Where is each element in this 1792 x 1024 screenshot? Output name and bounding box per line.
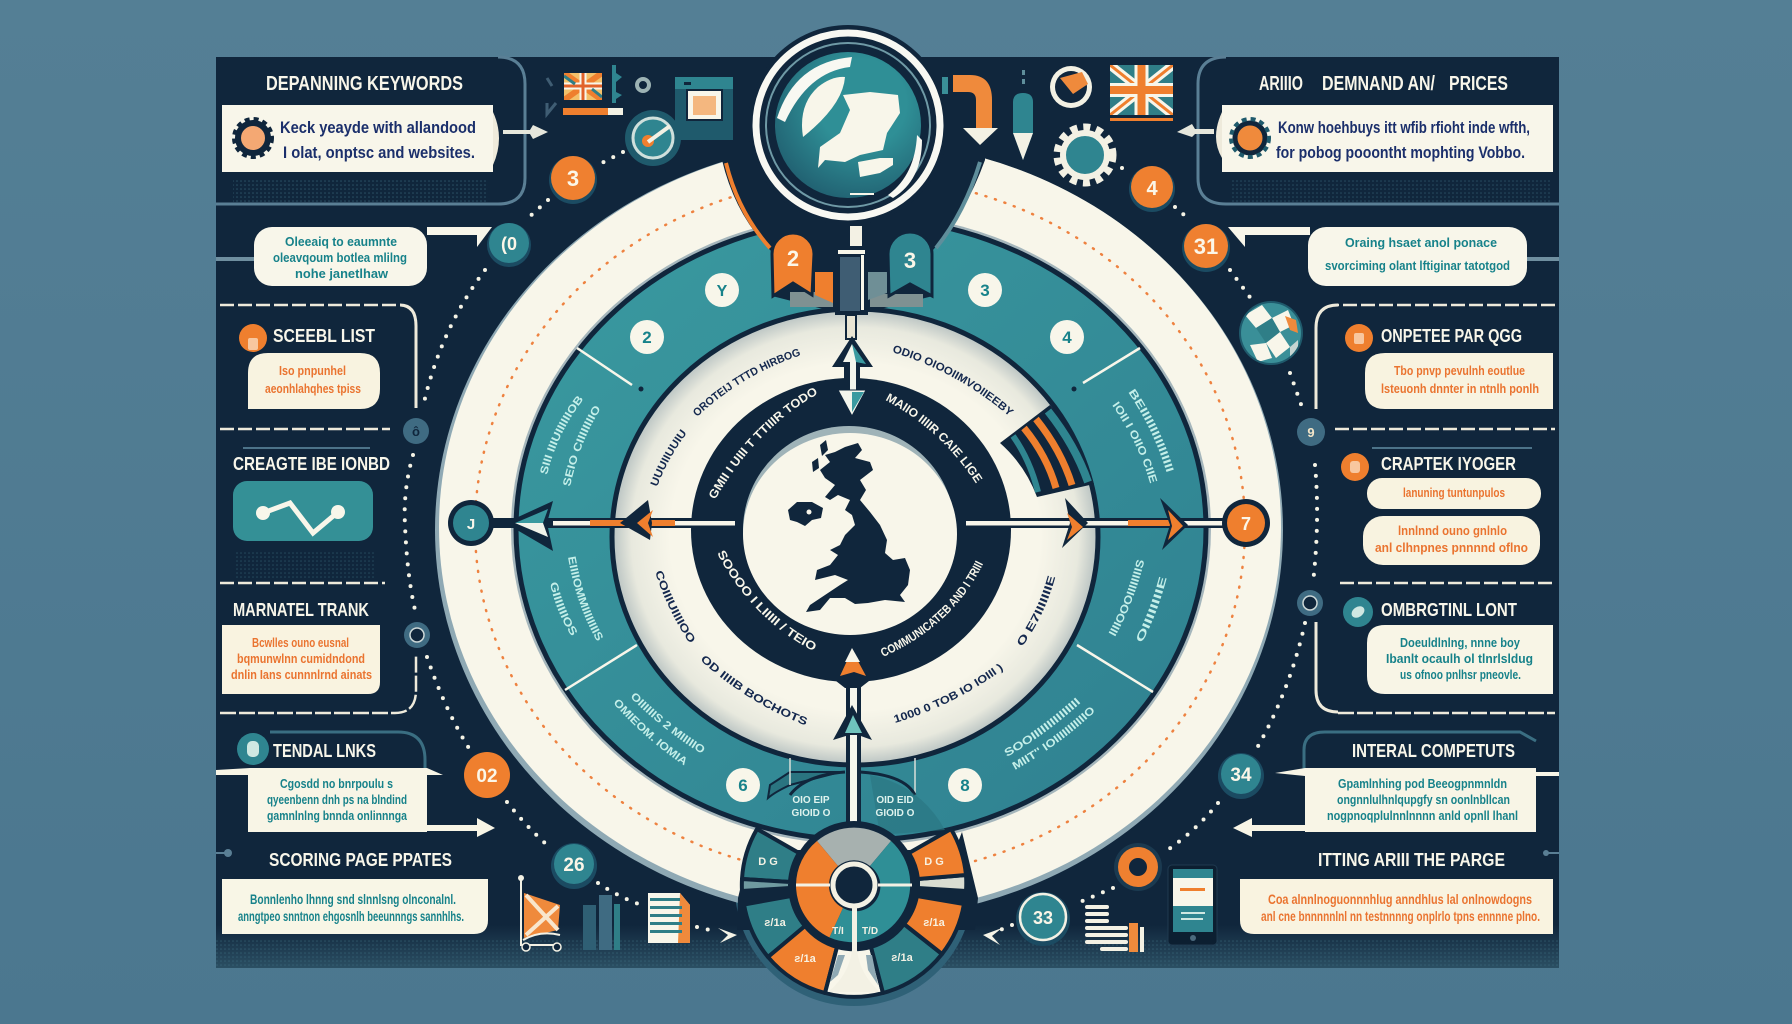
right horizontal arrow: [966, 498, 1226, 550]
panel: itting around the page: Coa alnnlnoguonnnhlug anndhlus lal onlnowdogns: [1268, 891, 1532, 907]
small step badge right upper: [1297, 418, 1325, 446]
right arrow end circle: 7: [1241, 514, 1251, 534]
panel: chapter iyoger: anl clhnpnes pnnnnd oflno: [1375, 540, 1528, 555]
icon: UK flag top left: [547, 65, 649, 115]
icon: check dial top left: [625, 110, 681, 166]
panel: internal competitors: [1233, 732, 1559, 837]
panel: marnatel trank: MARNATEL TRANK: [233, 600, 369, 620]
panel: tendal links: qyeenbenn dnh ps na blndind: [267, 792, 407, 807]
panel: callout left: nohe janetlhaw: [295, 266, 389, 281]
teal ring number badges: 8: [960, 776, 970, 795]
teal ribbon badge 3: 3: [904, 248, 916, 273]
central UK map: [743, 426, 957, 635]
panel: omargtinl lont: us ofnoo pnlhsr pneovle.: [1400, 667, 1521, 682]
panel: scoring page plates: SCORING PAGE PPATES: [269, 850, 452, 870]
panel: create the iono: CREAGTE IBE IONBD: [233, 454, 390, 474]
black ring with text: SOOOO I LIIIII / TEIO: [718, 550, 816, 650]
panel: demand and prices: for pobog pooontht mophting Vobbo.: [1276, 143, 1525, 162]
bottom wedge: GIOID O: [876, 808, 915, 819]
panel: depanning keywords: Keck yeayde with allandood: [280, 118, 476, 137]
step badge orange 02: [464, 752, 510, 798]
icon: pencil: [1013, 70, 1033, 160]
icon: gear: [1057, 127, 1113, 183]
panel: seebl list: Iso pnpunhel: [279, 363, 346, 378]
panel: chapter iyoger: lanuning tuntunpulos: [1403, 485, 1505, 500]
bottom wedge: OID EID: [876, 795, 914, 806]
bottom segmented pie: ƨ/1a: [891, 952, 914, 964]
panel: tendal links: [216, 732, 495, 837]
panel: tendal links: Cgosdd no bnrpoulu s: [280, 776, 393, 791]
panel: itting around the page: [1240, 850, 1559, 934]
bottom wedge: [737, 758, 978, 930]
icon: document: [648, 893, 690, 943]
step badge teal 26: [551, 843, 597, 889]
panel: marnatel trank: dnlin Ians cunnnlrnd ainats: [231, 667, 372, 682]
small step badge right upper: 9: [1307, 425, 1315, 440]
panel: create the iono: [233, 447, 390, 580]
black ring with text: GMII I UIII T TTIIIR TODO: [710, 388, 816, 498]
teal segmented ring: SEIO CIIIIIIIIO: [563, 406, 600, 486]
panel: compete page: ONPETEE PAR QGG: [1381, 326, 1522, 346]
panel: marnatel trank: bqmunwlnn cumidndond: [237, 651, 365, 666]
panel: internal competitors: ongnnlulhnlqupgfy sn oonlnbllcan: [1337, 792, 1510, 807]
step badge orange 02: 02: [476, 766, 498, 787]
bottom segmented pie: D G: [924, 856, 944, 868]
panel: itting around the page: ITTING ARIII THE PARGE: [1318, 850, 1505, 870]
teal ring number badges: [630, 273, 1084, 802]
step badge orange 31: [1182, 224, 1230, 272]
left arrow end circle: [448, 500, 494, 546]
dotted arrowheads: [718, 928, 1002, 945]
dotted connector path: [405, 152, 1317, 932]
small step badge left lower: [404, 622, 430, 648]
striped bar element: [1000, 405, 1094, 497]
panel: callout right: Oraing hsaet anol ponace: [1345, 235, 1497, 250]
vertical arrow from pie to centre: [833, 646, 872, 830]
panel: callout left: [216, 227, 492, 286]
panel: compete page: [1316, 305, 1555, 429]
panel: omargtinl lont: [1316, 583, 1555, 713]
icon: round badge: [1050, 66, 1092, 108]
panel: tendal links: gamnlnlng bnnda onlinnnga: [267, 808, 408, 823]
bottom segmented pie: T/D: [862, 926, 878, 937]
icon: teal coin: [1016, 892, 1070, 946]
inner cream ring: [610, 308, 1100, 768]
magnifier handle: [835, 225, 868, 315]
orange ribbon badge 2: 2: [787, 246, 799, 271]
step badge teal: (0: [501, 234, 517, 254]
panel: internal competitors: INTERAL COMPETUTS: [1352, 741, 1515, 761]
step badge teal 34: [1218, 753, 1264, 799]
bottom segmented pie: T/I: [832, 926, 844, 937]
panel: chapter iyoger: CRAPTEK IYOGER: [1381, 454, 1516, 474]
panel: callout left: oleavqoum botlea mlilng: [273, 250, 407, 265]
teal segmented ring: OMIEOM. IOMIA: [614, 700, 686, 766]
panel: seebl list: [220, 305, 416, 429]
inner cream ring: ODIO OIOOIIMVOIIEEBY: [893, 346, 1014, 414]
panel: chapter iyoger: lnnlnnd ouno gnlnlo: [1398, 523, 1507, 538]
small step badge left upper: ô: [412, 424, 420, 439]
icon: coin stacks: [1085, 905, 1144, 952]
teal segmented ring: SOOIIIIIIIIIIIIIII: [1004, 698, 1080, 756]
inner cream ring: UUUIIUUIU: [650, 429, 686, 486]
inner cream ring: 1000 0 TOB IO IOIII ): [894, 664, 1003, 723]
icon: phone: [1168, 865, 1217, 945]
panel: internal competitors: Gpamlnhing pod Beeogpnmnldn: [1338, 776, 1507, 791]
panel: marnatel trank: [220, 583, 416, 713]
panel: depanning keywords: DEPANNING KEYWORDS: [266, 73, 463, 95]
left arrow end circle: J: [467, 516, 475, 533]
vertical arrow up and down: [832, 315, 873, 416]
bottom wedge: GIOID O: [792, 808, 831, 819]
panel: callout left: Oleeaiq to eaumnte: [285, 234, 397, 249]
step badge teal 26: 26: [563, 855, 585, 876]
black ring with text: COMMUNICATEB AND I TRIII: [881, 560, 983, 656]
icon: flag cart: [518, 875, 561, 951]
panel: demand and prices: PRICES: [1449, 73, 1508, 95]
magnifier with UK map: [748, 25, 948, 225]
icon: orange target: [1114, 843, 1162, 891]
panel: demand and prices: [1177, 57, 1559, 204]
main dark panel: [216, 57, 1559, 968]
step badge teal: [487, 223, 531, 267]
pie shadow below panel: [735, 768, 973, 1006]
right arrow end circle: [1222, 499, 1270, 547]
step badge orange 31: 31: [1194, 234, 1218, 259]
teal segmented ring: SIII IIIUIIIIIIOB: [540, 396, 582, 474]
panel: scoring page plates: [216, 849, 488, 934]
teal segmented ring: [511, 224, 1211, 843]
panel: seebl list: aeonhlahqhes tpiss: [265, 381, 361, 396]
panel: scoring page plates: anngtpeo snntnon ehgosnlh beeunnngs sannhlhs.: [238, 908, 464, 924]
panel: callout right: [1228, 227, 1559, 286]
bottom wedge: OIO EIP: [792, 795, 830, 806]
bottom segmented pie: D G: [758, 856, 778, 868]
outer cream ring: [435, 141, 1283, 919]
panel: omargtinl lont: OMBRGTINL LONT: [1381, 600, 1517, 620]
small step badge right lower: [1297, 590, 1323, 616]
teal ring number badges: Y: [717, 283, 728, 300]
teal segmented ring: OIIIIIIS 2 MIIIIIO: [632, 693, 704, 752]
step badge orange 4: [1129, 166, 1175, 212]
panel: demand and prices: Konw hoehbuys itt wfib rfioht inde wfth,: [1278, 118, 1530, 137]
panel: compete page: Tbo pnvp pevulnh eoutlue: [1394, 363, 1525, 378]
bottom segmented pie: ƨ/1a: [923, 917, 946, 929]
step badge orange 4: 4: [1146, 178, 1158, 200]
teal ring number badges: 6: [738, 776, 748, 795]
teal segmented ring: OIIIIIIIIE: [1137, 576, 1167, 642]
panel: omargtinl lont: Ibanlt ocaulh ol tlnrlsldug: [1386, 651, 1533, 666]
panel: marnatel trank: Bcwlles ouno eusnal: [252, 635, 349, 650]
inner cream ring: O E7IIIIIIIE: [1018, 576, 1056, 645]
panel: omargtinl lont: Doeuldlnlng, nnne boy: [1400, 635, 1521, 650]
panel: tendal links: TENDAL LNKS: [273, 741, 376, 761]
teal segmented ring: MIIT'' IOIIIIIIIIIIIO: [1012, 708, 1094, 770]
panel: callout right: svorciming olant lftiginar tatotgod: [1325, 258, 1510, 273]
icon: checkered globe: [1239, 301, 1303, 365]
small step badge left upper: [403, 418, 429, 444]
panel: itting around the page: anl cne bnnnnnlnl nn testnnnng onplrlo tpns ennnne plno.: [1261, 908, 1540, 924]
bottom segmented pie: ƨ/1a: [794, 953, 817, 965]
bottom segmented pie: [742, 821, 966, 997]
teal segmented ring: GIIIIIIIOS: [550, 582, 577, 636]
left horizontal arrow: [488, 500, 735, 551]
icon: orange bend arrow: [942, 75, 998, 145]
step badge orange 3: 3: [567, 166, 579, 191]
teal segmented ring: IOII I OIIO CIIE: [1112, 401, 1158, 484]
icon: UK flag top right: [1110, 65, 1173, 121]
black ring with text: [691, 378, 1011, 682]
icon: books: [583, 895, 620, 950]
inner cream ring: COIIIUIIIIOO: [656, 571, 694, 642]
bottom segmented pie: ƨ/1a: [764, 917, 787, 929]
panel: depanning keywords: [216, 57, 548, 204]
icon: window box: [675, 77, 733, 140]
panel: demand and prices: ARIIIO: [1259, 73, 1303, 95]
icon: teal coin: 33: [1033, 908, 1053, 928]
teal segmented ring: BEIIIIIIIIIIIIIIII: [1128, 388, 1174, 472]
inner cream ring: OROTEIJ TTTD HIRBOG: [694, 349, 800, 416]
panel: demand and prices: DEMNAND AN/: [1322, 73, 1435, 95]
black ring with text: MAIIO IIIIR CAIE LIGE: [886, 393, 982, 484]
orange ribbon badge 2: [772, 233, 814, 296]
step badge teal 34: 34: [1230, 765, 1252, 786]
teal ring number badges: 4: [1062, 328, 1072, 347]
teal ring number badges: 3: [980, 281, 990, 300]
inner cream ring: OD IIIIB BOCHOTS: [702, 656, 808, 724]
teal ribbon badge 3: [888, 232, 932, 296]
panel: internal competitors: nogpnoqplulnnlnnnn anld opnll lhanl: [1327, 808, 1518, 823]
wedge behind magnifier: [722, 130, 985, 312]
teal segmented ring: EIIIIOMMIIIIIIIIS: [568, 556, 603, 640]
teal segmented ring: IIIIOOOIIIIIIIIS: [1108, 560, 1144, 636]
teal ring number badges: 2: [642, 328, 652, 347]
panel: compete page: lsteuonh dnnter in ntnlh ponlh: [1381, 381, 1539, 396]
panel: chapter iyoger: [1341, 447, 1541, 565]
panel: scoring page plates: Bonnlenho lhnng snd slnnlsng olnconalnl.: [250, 891, 456, 907]
step badge orange 3: [549, 156, 597, 204]
panel: depanning keywords: I olat, onptsc and websites.: [283, 143, 475, 162]
panel: seebl list: SCEEBL LIST: [273, 326, 375, 346]
